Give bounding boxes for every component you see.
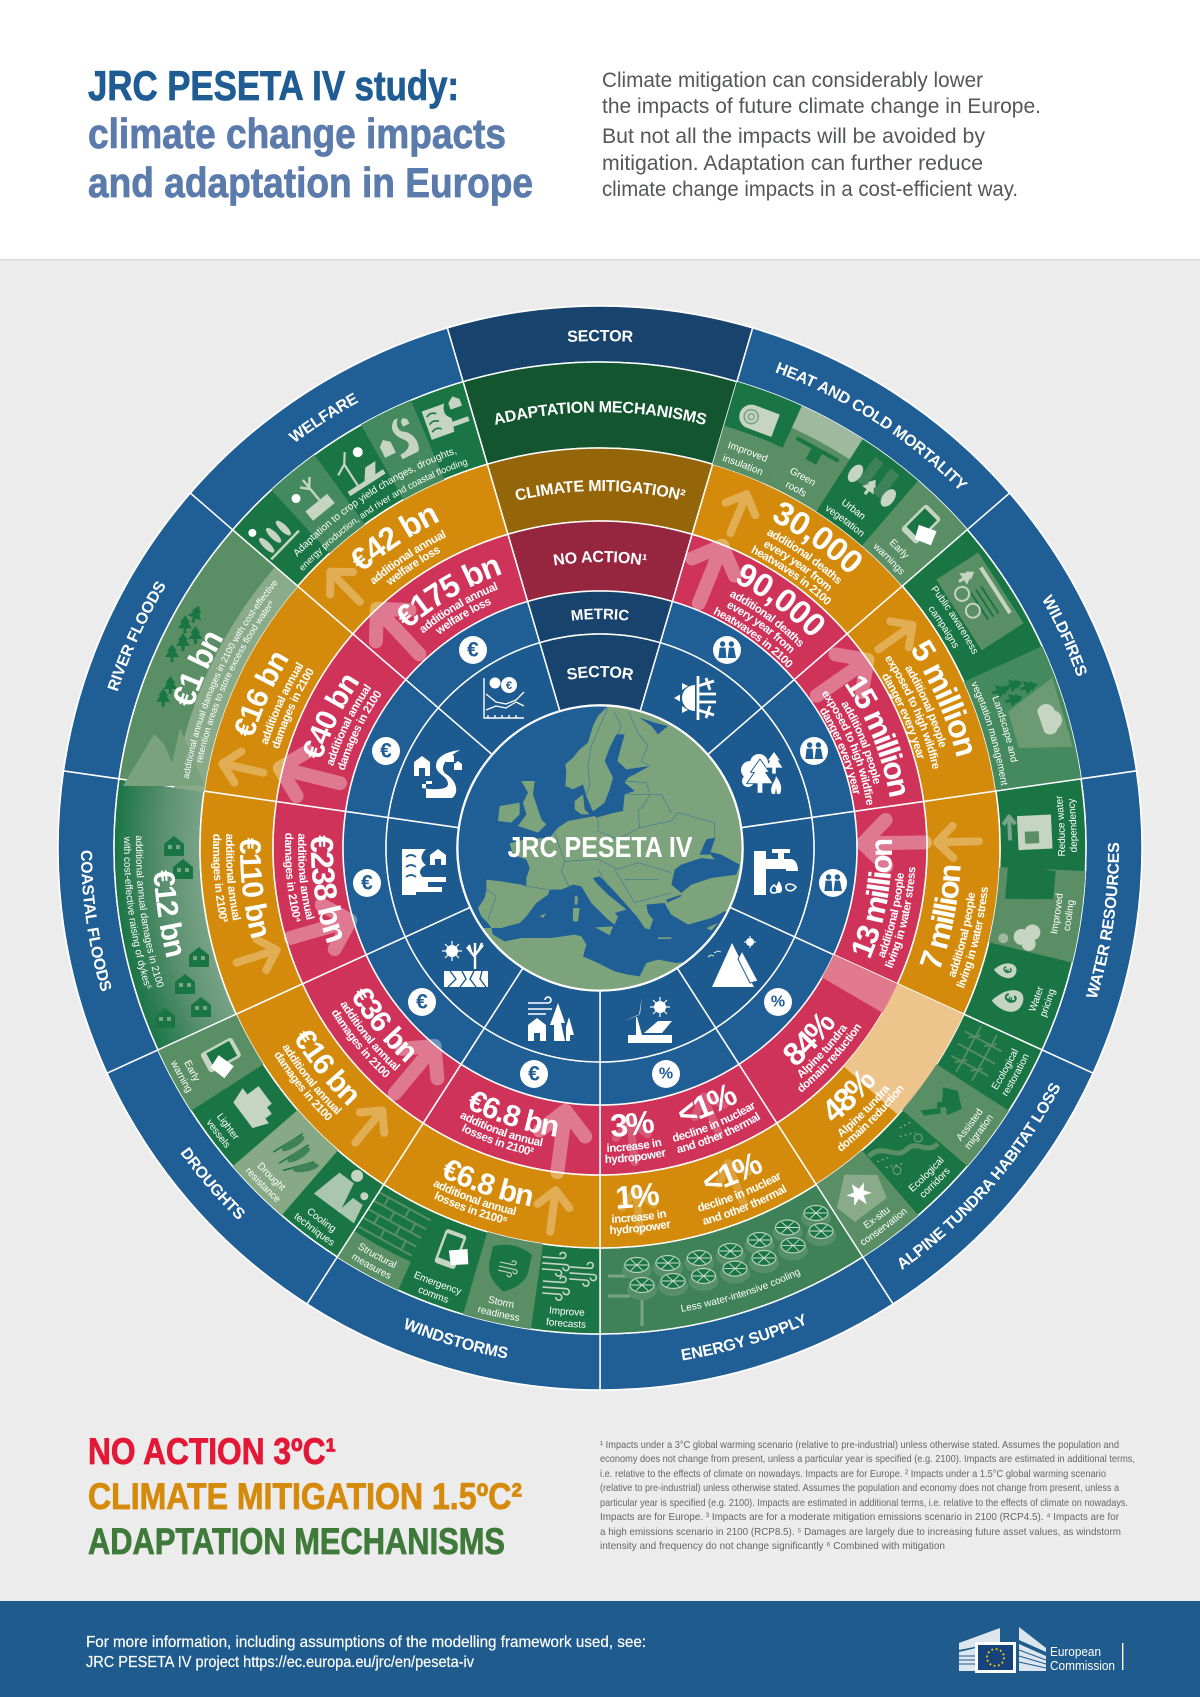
- stat: 84%: 84%: [774, 1003, 843, 1074]
- arrow: mitigation: [343, 1100, 394, 1153]
- adaptation: green roofs: Green: [790, 468, 815, 486]
- stat caption: mitigation 110 bn: damages in 2100³: [208, 833, 229, 924]
- icon: euro: €: [528, 1062, 540, 1086]
- adaptation: less water-intensive cooling: Less water-intensive cooling: [679, 1266, 803, 1319]
- panel: river floods: [44, 484, 539, 930]
- stat: 30,000: every year from: [764, 542, 831, 592]
- panel: droughts: DROUGHTS: [175, 1144, 249, 1225]
- adaptation: improve forecasts: forecasts: [545, 1317, 587, 1331]
- panel: heat and cold mortality: HEAT AND COLD MORTALITY: [776, 362, 968, 489]
- stat: 7 million: 7 million: [912, 859, 972, 975]
- stat: adaptation 12 bn: €12 bn: [144, 866, 192, 960]
- stat: 5 million: danger every year: [882, 674, 924, 758]
- icon: sun and snowflake: [674, 676, 716, 720]
- icon: percent: %: [659, 1066, 673, 1082]
- adaptation: urban vegetation: vegetation: [826, 505, 864, 537]
- stat: mitigation 16 bn: damages in 2100: [269, 1049, 335, 1125]
- panel: river floods: RIVER FLOODS: [102, 577, 171, 695]
- stat: mitigation 16 bn: €16 bn: [285, 1021, 369, 1113]
- title: climate change impacts: [88, 110, 506, 157]
- heading: inner sector: SECTOR: [567, 666, 633, 680]
- intro text: But not all the impacts will be avoided by: [602, 125, 985, 148]
- footnotes: [600, 1439, 1135, 1552]
- icon: euro: €: [416, 990, 428, 1014]
- adaptation: reduce water dependency: Reduce water: [1056, 796, 1066, 856]
- stat: no action 40 bn: [293, 666, 386, 776]
- adaptation: urban vegetation: Urban: [842, 498, 865, 520]
- river flood icon: [372, 415, 422, 466]
- circular wheel chart: [57, 305, 1143, 1391]
- stat: 90,000: 90,000: [736, 564, 824, 635]
- footnotes: intensity and frequency do not change significantly ⁶ Combined with mitigation: [600, 1540, 945, 1552]
- stat caption: 13 million: additional people: [876, 871, 910, 960]
- icon: river flood: [414, 750, 462, 798]
- stat: mitigation under 1%: <1%: [696, 1144, 768, 1202]
- footer text: [86, 1634, 646, 1671]
- panel: alpine tundra habitat loss: ALPINE TUNDRA HABITAT LOSS: [892, 1077, 1076, 1283]
- adaptation: improved insulation: Improved: [728, 442, 768, 462]
- adaptation cell: river flooding: [361, 400, 449, 502]
- icon: people: [819, 869, 847, 897]
- adaptation: structural measures: Structural: [356, 1241, 398, 1272]
- adaptation: lighter vessels: [200, 1080, 280, 1155]
- stat: 5 million: additional people: [905, 666, 946, 748]
- arrow: mitigation: [232, 935, 282, 978]
- panel: heat and cold mortality: [640, 328, 1008, 754]
- adaptation: urban vegetation: [816, 439, 918, 546]
- trowel icon and label: [920, 1087, 994, 1150]
- adaptation: early warnings: Early: [890, 538, 909, 558]
- adaptation: landscape and vegetation management: Landscape and: [992, 696, 1018, 762]
- footnotes: economy does not change from present, unless a particular year is specified (e.g. 2100). Impacts are estimated in additional terms,: [600, 1453, 1135, 1465]
- panel: windstorms: [308, 969, 601, 1390]
- wheat icon and label: Drought: [254, 1160, 288, 1194]
- stat: 90,000: [714, 564, 824, 668]
- wheat icon and label: [242, 1123, 329, 1210]
- arrow: mitigation: [534, 1188, 571, 1234]
- stat caption: no action 238 bn: damages in 2100⁴: [279, 831, 303, 925]
- adaptation: assisted migration: [899, 1059, 1010, 1167]
- adaptation: lighter vessels: vessels: [203, 1117, 232, 1151]
- adaptation: cooling techniques: Cooling: [304, 1206, 338, 1235]
- adaptation: public awareness campaigns: [929, 552, 1024, 654]
- wheat icon and label: resistance: [242, 1165, 283, 1206]
- stat: no action under 1%: <1%: [670, 1075, 743, 1134]
- stat caption: adaptation 12 bn: additional annual damages in 2100: [127, 834, 166, 990]
- highlight: pale mitigation patch: [835, 978, 964, 1122]
- icon: welfare chart: [484, 677, 524, 718]
- adaptation: houses behind dykes: [155, 836, 211, 1028]
- icon: forest fire: [741, 752, 782, 794]
- icon: euro: [372, 737, 400, 765]
- adaptation: ex-situ conservation: [811, 1147, 919, 1258]
- heading: sector: SECTOR: [568, 330, 632, 342]
- arrow: mitigation: [219, 748, 267, 788]
- stat: 3%: increase in: [605, 1137, 663, 1156]
- stat: mitigation under 1%: decline in nuclear: [695, 1169, 785, 1217]
- adaptation: early warning: [157, 1009, 266, 1111]
- adaptation cell: energy production: [329, 440, 386, 496]
- stat: mitigation losses: €6.8 bn: [436, 1151, 539, 1216]
- adaptation: reduce water dependency: dependency: [1068, 798, 1079, 852]
- icon: euro: [459, 636, 487, 664]
- icon: euro: €: [361, 872, 373, 894]
- stat caption: mitigation 110 bn: additional annual: [221, 833, 242, 922]
- adaptation text band: welfare: Adaptation to crop yield changes, droughts,: [285, 436, 460, 560]
- greenhouse icon and label: Ex-situ: [862, 1205, 893, 1232]
- adaptation: water pricing: [992, 963, 1056, 1018]
- trowel icon and label: Assisted: [954, 1107, 986, 1144]
- stat caption: 13 million: living in water stress: [883, 865, 923, 971]
- stat: 48%: [826, 1070, 904, 1151]
- stat caption: mitigation losses: additional annual: [430, 1177, 518, 1221]
- stat: no action under 1%: decline in nuclear: [670, 1099, 760, 1148]
- panel: windstorms: WINDSTORMS: [400, 1315, 511, 1365]
- adaptation: emergency comms: Emergency: [412, 1270, 463, 1298]
- logo: European Commission: [959, 1627, 1123, 1673]
- adaptation: cooling techniques: techniques: [291, 1211, 337, 1249]
- shield icon and label: [478, 1244, 532, 1321]
- arrow: mitigation rising: [869, 612, 922, 662]
- stat caption: adaptation 1 bn: additional annual damages in 2100 with cost-effective: [168, 572, 281, 782]
- stat: 1%: 1%: [613, 1175, 661, 1217]
- icon: euro: [408, 988, 436, 1016]
- adaptation: improve forecasts: Improve: [548, 1305, 586, 1319]
- footnotes: particular year is specified (e.g. 2100). Impacts are estimated in additional terms, i.e. relative to the effects of climate on nowadays.: [600, 1497, 1128, 1509]
- stat: 90,000: heatwaves in 2100: [714, 606, 792, 668]
- stat: 30,000: heatwaves in 2100: [751, 545, 831, 604]
- stat caption: no action losses: additional annual: [457, 1109, 545, 1152]
- icon: euro: [520, 1060, 548, 1088]
- greenhouse icon and label: [837, 1174, 908, 1245]
- stat: no action 238 bn: €238 bn: [299, 830, 356, 947]
- adaptation: ecological restoration: [951, 1026, 1029, 1096]
- stat caption: adaptation 12 bn: [115, 832, 166, 992]
- adaptation: public awareness campaigns: campaigns: [929, 606, 958, 648]
- icon: wind turbine and solar: [624, 997, 672, 1043]
- icon: welfare chart: €: [506, 680, 512, 692]
- stat: mitigation 16 bn: [225, 644, 318, 754]
- panel: wildfires: [708, 493, 1136, 827]
- footer text: For more information, including assumptions of the modelling framework used, see:: [86, 1634, 646, 1651]
- adaptation: early warnings: warnings: [874, 543, 904, 574]
- icon: percent: [764, 988, 792, 1016]
- intro text: [602, 69, 1041, 201]
- heading: climate mitigation: CLIMATE MITIGATION²: [516, 480, 686, 500]
- adaptation: retention area landscape: [123, 566, 298, 792]
- stat: no action 40 bn: additional annual: [321, 681, 375, 769]
- stat: 3%: 3%: [607, 1103, 656, 1145]
- icon: drought: [442, 941, 488, 987]
- stat: mitigation 16 bn: additional annual: [277, 1041, 344, 1119]
- adaptation: water pricing: pricing: [1038, 987, 1058, 1019]
- footnotes: i.e. relative to the effects of climate on nowadays. Impacts are for Europe. ² Impacts under a 1.5°C global warming scenario: [600, 1468, 1106, 1480]
- icon: euro: €: [380, 740, 392, 762]
- faint arrows: energy: [614, 1090, 758, 1234]
- arrow: no action rising: [678, 537, 743, 612]
- stat: 30,000: [751, 502, 862, 604]
- icon: people: [713, 636, 741, 664]
- stat: 15 million: additional people: [842, 702, 880, 784]
- arrow: no action: [377, 1031, 452, 1108]
- stat caption: no action losses: losses in 2100²: [459, 1122, 536, 1161]
- logo: European Commission: European: [1050, 1644, 1101, 1659]
- arrow: no action: [535, 1108, 588, 1175]
- icon: people: [800, 737, 828, 765]
- adaptation: improved cooling: [988, 867, 1086, 963]
- greenhouse icon and label: conservation: [858, 1206, 910, 1249]
- stat: 30,000: additional deaths: [767, 530, 841, 584]
- stat: 1%: increase in: [610, 1208, 668, 1227]
- panel: coastal floods: COASTAL FLOODS: [72, 848, 114, 995]
- stat: 15 million: exposed to high wildfire: [822, 691, 873, 806]
- adaptation: improved insulation: insulation: [722, 454, 762, 476]
- adaptation: lighter vessels: Lighter: [214, 1111, 241, 1143]
- stat: no action 175 bn: €175 bn: [386, 542, 510, 638]
- legend: [88, 1431, 522, 1562]
- stat: no action 40 bn: €40 bn: [293, 666, 367, 767]
- stat: adaptation 1 bn: €1 bn: [163, 624, 231, 713]
- adaptation: structural measures: measures: [349, 1251, 393, 1282]
- stat: mitigation 16 bn: damages in 2100: [268, 665, 317, 752]
- icon: euro: [353, 869, 381, 897]
- footnotes: ¹ Impacts under a 3°C global warming scenario (relative to pre-industrial) unless otherwise stated. Assumes the population and: [600, 1439, 1119, 1451]
- arrow: no action falling: [863, 819, 925, 866]
- heading: no action: NO ACTION¹: [554, 550, 647, 566]
- stat: 84%: Alpine tundra: [794, 1021, 852, 1082]
- stat: no action 36 bn: [325, 978, 426, 1084]
- footer text: JRC PESETA IV project https://ec.europa.eu/jrc/en/peseta-iv: [86, 1654, 474, 1671]
- stat caption: adaptation 12 bn: with cost-effective raising of dykes⁶: [115, 834, 154, 992]
- adaptation: structural measures: [338, 1192, 432, 1290]
- legend: CLIMATE MITIGATION 1.5ºC²: [88, 1476, 522, 1517]
- map: Europe: [458, 706, 745, 990]
- stat: no action losses: €6.8 bn: [461, 1083, 565, 1147]
- adaptation: green roofs: [766, 406, 863, 512]
- adaptation: emergency comms: [414, 1229, 468, 1303]
- legend: NO ACTION 3ºC¹: [88, 1431, 336, 1472]
- title: JRC PESETA IV study:: [88, 62, 459, 109]
- intro text: mitigation. Adaptation can further reduce: [602, 152, 983, 175]
- adaptation: less water-intensive cooling: [608, 1204, 836, 1326]
- stat: no action 175 bn: additional annual: [416, 578, 501, 637]
- panel: header wedge: [448, 306, 752, 710]
- icon: percent: [652, 1060, 680, 1088]
- stat: 5 million: exposed to high wildfire: [886, 656, 938, 769]
- stat: no action 36 bn: damages in 2100: [326, 1006, 392, 1082]
- adaptation: ecological corridors: corridors: [918, 1166, 953, 1201]
- stat caption: no action 238 bn: additional annual: [292, 832, 316, 921]
- adaptation: reduce water dependency: [1002, 796, 1079, 856]
- stat: 1%: hydropower: [608, 1218, 672, 1238]
- heading: adaptation mechanisms: ADAPTATION MECHANISMS: [495, 401, 706, 425]
- stat: mitigation 42 bn: additional annual: [366, 526, 449, 588]
- title: [88, 62, 533, 206]
- footer bar: [0, 1601, 1200, 1697]
- stat: 15 million: [820, 676, 906, 806]
- trowel icon and label: migration: [963, 1112, 996, 1152]
- stat caption: mitigation losses: losses in 2100⁵: [432, 1190, 510, 1229]
- adaptation: storm readiness: [463, 1230, 549, 1330]
- footnotes: a high emissions scenario in 2100 (RCP8.5). ⁵ Damages are largely due to increasing future asset values, as windstorm: [600, 1526, 1121, 1538]
- stat: mitigation 42 bn: [341, 493, 459, 599]
- arrow: no action: [274, 746, 346, 805]
- adaptation: cooling techniques: [291, 1155, 381, 1251]
- stat caption: mitigation 110 bn: [208, 832, 242, 924]
- stat: 90,000: additional deaths: [730, 592, 803, 647]
- adaptation: landscape and vegetation management: vegetation management: [972, 681, 1008, 786]
- adaptation: emergency comms: comms: [416, 1284, 450, 1306]
- panel: wildfires: WILDFIRES: [1043, 594, 1087, 676]
- stat caption: no action losses: [453, 1109, 545, 1163]
- panel: water resources: [731, 770, 1142, 1072]
- stat: mitigation 16 bn: [268, 1021, 369, 1126]
- stat: mitigation 110 bn: €110 bn: [229, 834, 277, 941]
- stat: mitigation 16 bn: €16 bn: [225, 644, 296, 744]
- stat: 13 million: 13 million: [842, 833, 906, 964]
- adaptation: drought resistance: [232, 1106, 342, 1216]
- footnotes: Impacts are for Europe. ³ Impacts are for a moderate mitigation emissions scenario in 2100 (RCP4.5). ⁴ Impacts are for: [600, 1511, 1119, 1523]
- intro text: the impacts of future climate change in Europe.: [602, 95, 1041, 118]
- stat: no action 36 bn: €36 bn: [341, 978, 426, 1071]
- stat: 5 million: 5 million: [912, 639, 972, 757]
- stat: no action under 1%: and other thermal: [674, 1110, 764, 1159]
- map title: JRC PESETA IV: [508, 832, 693, 864]
- panel: energy supply: ENERGY SUPPLY: [678, 1311, 811, 1368]
- stat caption: 7 million: additional people: [946, 891, 981, 980]
- stat: 1%: [610, 1183, 670, 1236]
- phone icon and label: [167, 1030, 247, 1099]
- adaptation: improved cooling: cooling: [1062, 899, 1077, 932]
- adaptation: green roofs: roofs: [786, 482, 806, 496]
- adaptation: improve forecasts: [542, 1252, 598, 1328]
- panel: coastal floods: [42, 716, 486, 1076]
- stat: 48%: 48%: [813, 1061, 883, 1131]
- adaptation: water pricing: €: [1000, 964, 1015, 975]
- stat: 15 million: danger every year: [820, 708, 860, 794]
- arrow: no action: [360, 593, 436, 670]
- adaptation: improved insulation: [712, 382, 802, 484]
- arrow: no action: [284, 898, 357, 960]
- stat: 3%: [605, 1111, 666, 1166]
- adaptation cell: coastal flooding: [420, 394, 471, 440]
- adaptation: ecological restoration: Ecological: [990, 1047, 1022, 1092]
- panel: welfare: [178, 309, 654, 815]
- stat caption: 7 million: living in water stress: [955, 885, 994, 991]
- stat: no action 36 bn: additional annual: [335, 998, 403, 1076]
- adaptation text band: welfare: energy production, and river and coastal flooding: [290, 446, 471, 574]
- stat: 30,000: 30,000: [774, 502, 862, 572]
- stat: mitigation under 1%: and other thermal: [700, 1183, 790, 1230]
- footnotes: (relative to pre-industrial) unless otherwise stated. Assumes the population and economy does not change from present, unless a: [600, 1482, 1119, 1494]
- stat: mitigation 42 bn: €42 bn: [341, 493, 446, 580]
- legend: ADAPTATION MECHANISMS: [88, 1521, 505, 1562]
- panel: droughts: [90, 822, 596, 1318]
- stat: 90,000: every year from: [727, 602, 794, 654]
- panel: water resources: WATER RESOURCES: [1086, 842, 1120, 997]
- stat: mitigation 16 bn: additional annual: [256, 660, 307, 747]
- icon: dripping tap: [754, 849, 798, 895]
- shield icon and label: readiness: [476, 1304, 521, 1325]
- stat: 15 million: 15 million: [845, 676, 906, 797]
- panel: energy supply: [600, 968, 894, 1390]
- shield icon and label: Storm: [487, 1295, 515, 1311]
- icon: percent: %: [771, 994, 785, 1010]
- stat: mitigation 42 bn: welfare loss: [383, 543, 443, 589]
- adaptation: improved cooling: Improved: [1050, 894, 1063, 934]
- icon: mountain: [708, 936, 758, 987]
- stat: 48%: domain reduction: [834, 1082, 909, 1156]
- stat: mitigation under 1%: [698, 1153, 787, 1225]
- stat: 3%: hydropower: [604, 1147, 668, 1168]
- adaptation: early warnings: [862, 480, 967, 586]
- panel: alpine tundra habitat loss: [678, 907, 1093, 1303]
- icon: storm house and trees: [528, 997, 574, 1041]
- intro text: climate change impacts in a cost-efficient way.: [602, 178, 1018, 201]
- stat: no action 40 bn: damages in 2100: [333, 687, 385, 773]
- panel: welfare: WELFARE: [286, 389, 362, 447]
- logo: European Commission: Commission: [1050, 1658, 1115, 1673]
- adaptation: ecological corridors: [867, 1122, 950, 1198]
- adaptation: ecological restoration: restoration: [1000, 1052, 1032, 1099]
- intro text: Climate mitigation can considerably lower: [602, 69, 983, 92]
- phone icon and label: Early: [181, 1058, 202, 1084]
- stat: 5 million: [882, 639, 972, 769]
- stat: 84%: domain reduction: [794, 1020, 867, 1098]
- stat caption: adaptation 1 bn: retention areas to store excess flood water⁶: [185, 594, 277, 766]
- stat: 48%: Alpine tundra: [835, 1082, 894, 1141]
- arrow: no action rising: [804, 641, 881, 714]
- arrow: mitigation falling: [937, 825, 979, 858]
- arrow: mitigation rising: [716, 488, 761, 539]
- icon: euro: €: [467, 638, 479, 662]
- phone icon and label: warning: [167, 1058, 194, 1095]
- highlight: pale no action patch: [819, 954, 897, 1013]
- adaptation: water pricing: Water: [1027, 984, 1047, 1013]
- heading: metric: METRIC: [571, 608, 629, 621]
- stat: no action 175 bn: welfare loss: [432, 594, 494, 638]
- arrow: mitigation: [319, 561, 371, 613]
- adaptation cell: droughts: [271, 454, 369, 556]
- title: and adaptation in Europe: [88, 159, 533, 206]
- adaptation: water pricing: €: [1000, 991, 1022, 1006]
- drought icon: [286, 474, 335, 523]
- adaptation: landscape and vegetation management: [964, 646, 1081, 790]
- stat caption: no action 238 bn: [279, 830, 316, 925]
- adaptation: public awareness campaigns: Public awareness: [931, 586, 977, 654]
- adaptation: ecological corridors: Ecological: [907, 1155, 947, 1195]
- stat: no action under 1%: [672, 1084, 760, 1153]
- adaptation cell: crop yield: [245, 506, 299, 559]
- icon: coastal flood: [402, 849, 446, 895]
